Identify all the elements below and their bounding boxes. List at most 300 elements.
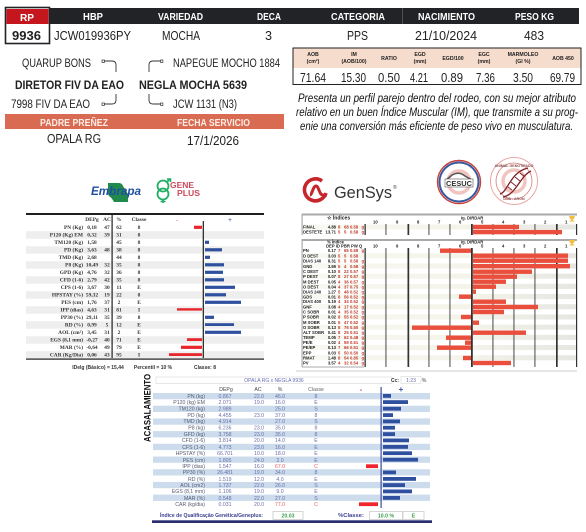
row labels and values: 0.52 [350,320,359,325]
row group: Embrapa values: 0,32 [87,232,97,238]
row values: PP30 (%) [183,470,205,476]
carcass measures table: (mm) [414,59,427,65]
row labels and values: 3.08 [328,304,337,310]
row group: Embrapa values: -0,27 [86,338,98,344]
row values: 26.481 [217,470,233,476]
row labels and values: M DEST [303,279,319,284]
row labels and values: ALT SOBR [303,330,324,335]
row labels and values: 22 [344,269,349,274]
row group: Embrapa values: 2,68 [87,255,97,261]
row labels and values: 0.01 [328,320,337,325]
row values: 27.0 [275,496,285,502]
carcass measures table: EGC [478,52,490,58]
row labels and values: 37 [344,284,349,289]
row values: 22.0 [254,483,264,489]
row labels and values: 8 [338,314,341,320]
row group: Embrapa values: 3,45 [87,330,97,336]
chart: GenSys detail panel: Ig. DIRDAR [461,240,483,244]
row group: Embrapa values: E [137,330,141,336]
row labels and values: 3.03 [328,253,337,258]
chart: mating projection table: AC [254,387,262,393]
row labels and values: 0.02 [328,340,337,345]
row values: 8 [315,432,318,438]
row labels and values: 0.17 [328,248,337,253]
header bar: animal data labels [49,8,579,24]
row values: 1.547 [219,464,232,470]
row group: Embrapa values: P8 (Kg) [65,262,83,268]
pedigree: JCW 1131 (N3) [173,99,237,111]
row labels and values: P SOBR [303,314,319,320]
row values: 1.737 [219,483,232,489]
row labels and values: 32 [344,360,349,366]
chart: mating projection table: + [399,385,404,394]
header bar: animal data labels: HBP [83,12,103,23]
index footer [152,511,432,523]
chart: Embrapa Geneplus DEP table: AC [103,217,111,223]
row labels and values: 0.48 [350,335,359,340]
row group: Embrapa values: CFD (1-6) [60,276,83,284]
logo: Embrapa: Embrapa [91,186,142,198]
pedigree [11,58,280,111]
row labels and values: g [362,330,364,335]
row values: 46.0 [275,394,285,400]
carcass measures table: AOB 450 [552,56,574,62]
row group: Embrapa values: 47 [104,225,110,231]
row labels and values: PV [303,360,309,366]
row labels and values: 0.57 [350,279,359,284]
row labels and values: 4 [338,304,341,310]
row values: 16.0 [275,400,285,406]
carcass measures table: MARMOLEO [508,52,538,58]
row values: CAR (kg/dia) [175,502,205,508]
row group: Embrapa values: CPS (1-6) [61,284,83,291]
chart: GenSys summary panel: 0.58 [350,230,359,234]
chart: GenSys summary panel [302,214,577,235]
seal: CESUC [438,160,480,204]
row values: GFD (kg) [184,432,205,438]
row group: Embrapa values: PD (Kg) [64,246,83,254]
carcass measures table: 3.50 [513,71,533,85]
row labels and values: DIAS 240 [303,290,322,294]
chart: Embrapa Geneplus DEP table: % [116,217,122,223]
row group: Embrapa values: 2,79 [87,278,97,284]
row labels and values: D DEST [303,253,319,258]
chart: GenSys detail panel: 9 [396,244,399,248]
row values: E [314,451,318,457]
header bar: animal data labels: DECA [257,12,281,23]
chart: Embrapa Geneplus DEP table: Classe [132,217,147,223]
row labels and values: g [362,279,364,284]
RP badge: 9936 [12,29,41,43]
row labels and values: 0.51 [350,340,359,345]
row group: Embrapa values: 22 [116,292,122,298]
chart: mating projection table: - [360,387,363,394]
index footer: Índice de Qualificação Genética/Geneplus: [160,511,263,519]
row labels and values: DIAS 400 [303,299,322,304]
row values: 19.0 [254,489,264,495]
row labels and values: 0.52 [350,314,359,320]
row values: 25.0 [275,406,285,412]
chart: GenSys detail panel: 5 [481,244,484,248]
row values: 66.701 [217,451,233,457]
row labels and values [303,248,364,366]
chart: GenSys detail panel: 10 [373,244,378,248]
row labels and values: 3.69 [328,264,337,269]
chart: GenSys summary panel: 9 [396,220,399,224]
row values: 35.0 [275,426,285,432]
row values: 0.867 [219,394,232,400]
carcass measures table: 7.36 [476,71,495,85]
row labels and values: 8 [338,330,341,335]
row labels and values: g [362,360,364,366]
row group: Embrapa values: PP30 (%) [61,314,83,321]
chart: GenSys detail panel: 3 [523,244,526,248]
row group: Embrapa values: 8 [138,262,141,268]
row group: Embrapa values: E [137,338,141,344]
row group: Embrapa values: 44 [116,255,122,261]
chart: GenSys detail panel: % Índice [327,240,345,244]
row labels and values: 0.58 [350,248,359,253]
chart: Embrapa Geneplus DEP table: Classe: 8 [194,365,216,371]
logo: Gene Plus [158,179,201,203]
chart: Embrapa Geneplus DEP table: IDelg (Básico) = 15,44 [72,365,124,371]
row group: Embrapa values: I [138,308,140,314]
row labels and values: PE/EP [303,345,316,350]
row values: 2.071 [219,400,232,406]
row values: E [314,489,318,495]
row values: 8 [315,394,318,400]
carcass measures table: 0.50 [378,71,400,85]
row values: S [314,419,318,425]
row labels and values: PE/E [303,340,313,345]
row labels and values: 25 [344,330,349,335]
row values: 2.989 [219,406,232,412]
pedigree: NAPEGUE MOCHO 1884 [173,58,280,70]
row group: Embrapa values: 45 [116,240,122,246]
chart: mating projection table: Classe [308,387,324,393]
row group: Embrapa values: 0,06 [87,352,97,358]
row group: Embrapa values: 4,76 [87,270,97,276]
row group: Embrapa values: HPSTAY (%) [52,292,83,298]
row values: S [314,483,318,489]
chart: GenSys summary panel: g [362,230,364,234]
chart: mating projection table: 1:23 [406,378,416,384]
row values: RD (%) [188,477,205,483]
row group: Embrapa values: 32 [104,270,110,276]
chart: GenSys summary panel: 2 [544,220,547,224]
chart: GenSys summary panel: 4 [502,220,505,224]
row group: Embrapa values: 4,63 [87,308,97,314]
row group: Embrapa values: 2 [118,300,121,306]
chart: Embrapa Geneplus DEP table: DEPg [85,217,99,223]
logo: Gene Plus: GENE [170,181,195,190]
RP badge: RP [20,12,34,24]
chart: GenSys summary panel: ☆ Índices [327,214,350,222]
row group: Embrapa values: 10,49 [86,262,98,268]
carcass measures table: 15.30 [341,71,366,85]
row labels and values: 0.52 [350,299,359,304]
header values [54,28,544,43]
row labels and values: 0.52 [350,290,359,294]
row labels and values: 48 [344,290,349,294]
service sire band: 17/1/2026 [187,134,239,148]
row values: AOL (cm2) [180,483,205,489]
row group: Embrapa values: TM120 (Kg) [54,239,83,246]
row values: 35.0 [275,432,285,438]
row group: Embrapa values: PN (Kg) [64,224,83,231]
row labels and values: 4 [338,360,341,366]
header values: MOCHA [162,28,200,43]
row labels and values: 8 [338,269,341,274]
row group: Embrapa values: 31 [116,232,122,238]
row values: 4.914 [219,419,232,425]
row labels and values: 0.03 [328,350,337,356]
row group: Embrapa values: 42 [104,278,110,284]
chart: GenSys summary panel: g [362,224,364,230]
row labels and values: 5 [338,253,341,258]
row labels and values: 0.57 [350,274,359,279]
header values: 21/10/2024 [415,28,477,43]
carcass measures table: 69.79 [550,71,575,85]
chart: GenSys detail panel: 8 [417,244,420,248]
row values: 2.0 [276,458,284,464]
chart: GenSys detail panel: 2 [544,244,547,248]
row labels and values: 35 [344,310,349,314]
row labels and values: g [362,258,364,263]
row labels and values: g [362,269,364,274]
bars: GenSys deviations [412,248,570,365]
row values: 4.0 [276,477,284,483]
row labels and values: g [362,310,364,314]
row values: 8 [315,413,318,419]
description text [296,91,578,133]
row labels and values: g [362,248,364,253]
row values: 22.0 [254,496,264,502]
row labels and values: g [362,295,364,300]
header bar: animal data labels: PESO KG [515,12,554,23]
pedigree: NEGLA MOCHA 5639 [139,80,247,92]
row labels and values: 55 [344,314,349,320]
row group: Embrapa values: 43 [104,352,110,358]
row values: 3.814 [219,438,232,444]
row labels and values: 0.75 [350,284,359,289]
logo: GenSys [304,179,397,202]
row labels and values: g [362,325,364,330]
row labels and values: C SOBR [303,310,319,314]
row values: 4.773 [219,445,232,451]
row labels and values: g [362,345,364,350]
row group: Embrapa values: 8 [138,240,141,246]
row group: Embrapa values: 32 [104,262,110,268]
row group: Embrapa values: 40 [104,338,110,344]
row group: Embrapa values: 62 [116,225,122,231]
carcass measures table: IM [351,52,357,58]
row labels and values: g [362,340,364,345]
row values: 10.0 [254,451,264,457]
row values: PES (cm) [183,458,205,464]
row group: Embrapa values: 37 [104,300,110,306]
row group: Embrapa values: P120 (Kg) EM [50,232,83,238]
row labels and values: g [362,356,364,360]
row group: Embrapa values: 8 [138,292,141,298]
row group: Embrapa values: 5 [106,322,109,328]
bars: mating deviations [359,394,418,506]
index footer: %Classe: [338,513,364,519]
row labels and values: 5 [344,258,347,263]
row labels and values: 50 [344,350,349,356]
row labels and values: g [362,290,364,294]
row values: 9.0 [276,489,284,495]
row group: Embrapa values: CAR (Kg/Dia) [50,352,83,358]
row labels and values: 8.31 [328,258,337,263]
row labels and values: GND [303,264,312,269]
row labels and values: M SOBR [303,320,320,325]
service sire band: OPALA RG [47,132,101,146]
row values: PD (kg) [187,413,205,419]
chart: GenSys summary panel: 5 [338,230,341,234]
chart: GenSys summary panel: 13.71 [326,230,337,234]
row labels and values: 0.54 [350,360,359,366]
row labels and values: EPP [303,350,312,356]
row labels and values: 5 [338,264,341,269]
row values: 19.0 [254,470,264,476]
chart: GenSys detail panel: 1 [565,244,568,248]
row labels and values: 5 [338,350,341,356]
row values: E [314,438,318,444]
logo: Gene Plus: PLUS [177,189,201,198]
row group: Embrapa values: 12 [116,322,122,328]
chart: GenSys summary panel: FINAL [303,224,316,230]
row values: 27.0 [275,419,285,425]
row labels and values: 7 [338,248,341,253]
chart: GenSys summary panel: 5 [344,230,347,234]
row labels and values: 5.19 [328,299,337,304]
row labels and values: 0.01 [328,310,337,314]
row values: CFS (1-6) [182,445,205,451]
row labels and values: O DEST [303,284,319,289]
row group: Embrapa values: 3,67 [87,285,97,291]
row labels and values: 0.50 [350,325,359,330]
row labels and values: 5 [338,290,341,294]
row labels and values: 65 [344,248,349,253]
row values: 1.106 [219,489,232,495]
row values: HPSTAY (%) [176,451,205,457]
row group: Embrapa values: 95 [116,352,122,358]
row group: Embrapa values: AOL (cm²) [58,329,83,336]
row group: Embrapa values: E [137,285,141,291]
row group: Embrapa values: 8 [138,255,141,261]
chart: GenSys detail panel: 4 [502,244,505,248]
chart: GenSys summary panel: 68 [344,224,349,230]
row labels and values: 17 [344,304,349,310]
row labels and values: 76 [344,325,349,330]
row labels and values: 4 [338,310,341,314]
row labels and values: 36 [344,279,349,284]
index footer: E [412,514,416,520]
row group: Embrapa values: 2 [118,330,121,336]
service sire band [5,114,284,148]
carcass measures table: EGD [414,52,426,58]
row group: Embrapa values: 59,32 [86,292,98,298]
row group: Embrapa values: 39 [116,315,122,321]
chart: mating projection table: OPALA RG x NEGLA 9936 [244,378,304,384]
row labels and values: 0.50 [350,350,359,356]
row values: 16.0 [275,445,285,451]
chart: GenSys summary panel: 8 [338,224,341,230]
row labels and values: P DEST [303,274,318,279]
chart: Embrapa Geneplus DEP table: - [176,218,178,224]
chart: GenSys detail panel: 7 [438,244,441,248]
header values: PPS [347,28,368,43]
row labels and values: 0.52 [350,304,359,310]
chart: GenSys detail panel: 6 [459,244,462,248]
row group: Embrapa values: -0,64 [86,345,98,351]
seal: genomic animal: DNA - ARGN [503,197,525,201]
logo: Embrapa [91,183,142,202]
row group: Embrapa values: 8 [138,248,141,254]
seal: genomic animal: ANIMAL GENOTIPADO [495,164,534,168]
chart: mating projection table: % [422,378,427,384]
row values: 1.895 [219,458,232,464]
carcass measures table: RATIO [381,56,397,62]
row group: Embrapa values: GPD (Kg) [60,269,83,276]
chart: GenSys detail panel: DEP ID PBR PW Q [326,244,363,248]
row group: Embrapa values: E [137,322,141,328]
row values: EGS (8,1 mm) [172,489,205,495]
row group: Embrapa values: 35 [104,315,110,321]
carcass measures table: (mm) [478,59,491,65]
row labels and values: 27 [344,274,349,279]
header values: 3 [265,28,272,43]
row values: P8 (kg) [188,426,205,432]
row group: Embrapa values: 79 [116,345,122,351]
row labels and values: 0.13 [328,345,337,350]
row values: S [314,496,318,502]
row labels and values: PN [303,248,309,253]
row labels and values: 0.51 [350,345,359,350]
row group: Embrapa values: 36 [116,270,122,276]
row values: C [314,502,318,508]
row labels and values: 0.51 [350,330,359,335]
bars: Embrapa deviations [169,226,241,356]
row values: 20.0 [254,502,264,508]
row values: 0.031 [219,502,232,508]
row values: E [314,445,318,451]
row labels and values: 0.58 [350,264,359,269]
row values: 20.0 [254,438,264,444]
row labels and values: 0.10 [328,269,337,274]
row labels and values: 3.57 [328,360,337,366]
header bar: animal data labels: CATEGORIA [331,12,385,23]
chart: GenSys summary panel: 6 [459,220,462,224]
header values: 483 [524,28,544,43]
row labels and values: 5 [338,258,341,263]
chart: GenSys detail panel [302,239,577,368]
row values: 3.758 [219,432,232,438]
logo: GenSys: GenSys [334,183,392,202]
row labels and values: DIAS 140 [303,258,322,263]
row group: Embrapa values: 29,11 [86,315,98,321]
row labels and values: 0.58 [350,258,359,263]
row values: 8 [315,470,318,476]
row group: Embrapa values: 35 [116,278,122,284]
row group: Embrapa values: 19 [104,292,110,298]
row group: Embrapa values: EGS (8,1 mm) [50,336,83,344]
row group: Embrapa values: 71 [116,338,122,344]
row labels and values: 1.27 [328,290,337,294]
row labels and values: 62 [344,335,349,340]
seal: genomic animal [490,158,538,204]
